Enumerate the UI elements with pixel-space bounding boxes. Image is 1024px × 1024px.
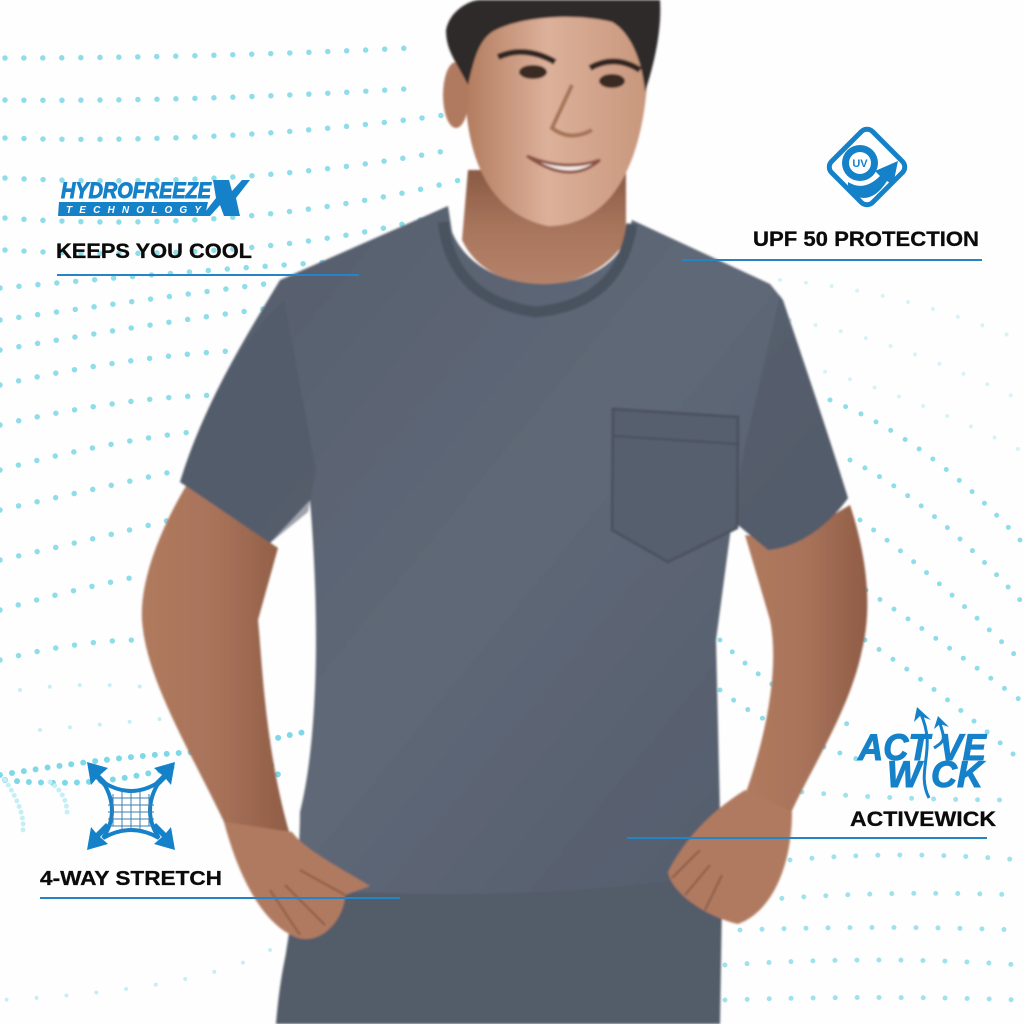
hydrofreeze logo: TECHNOLOGY (66, 205, 202, 216)
callout: upf (682, 126, 982, 261)
activewick logo: W CK (887, 754, 985, 795)
stretch icon (87, 762, 175, 850)
keeps you cool label: KEEPS YOU COOL (56, 240, 252, 263)
uv icon (826, 126, 908, 208)
activewick label: ACTIVEWICK (850, 808, 996, 831)
callout line (57, 274, 359, 276)
callout line (627, 837, 987, 839)
right hand (668, 790, 792, 924)
neck (462, 170, 626, 285)
mouth (527, 156, 600, 172)
hydrofreeze logo: HYDROFREEZE (61, 178, 212, 203)
head (465, 5, 647, 226)
pocket (612, 409, 738, 562)
eyebrows and eyes (498, 52, 640, 70)
shirt (180, 206, 848, 1024)
hair (446, 0, 660, 92)
shirt lower fold (276, 880, 720, 1024)
activewick logo: ACT VE (857, 727, 987, 768)
nose (552, 85, 592, 136)
collar (443, 222, 632, 312)
hydrofreeze logo (58, 178, 250, 216)
pocket band (613, 436, 738, 444)
upf label: UPF 50 PROTECTION (753, 227, 979, 251)
callout: hydrofreeze (56, 178, 359, 276)
left hand (224, 822, 370, 939)
right arm (745, 505, 867, 815)
callout line (40, 897, 400, 899)
stretch label: 4-WAY STRETCH (40, 867, 222, 890)
callout: activewick (627, 707, 996, 839)
left arm (142, 486, 290, 835)
activewick logo (857, 707, 987, 798)
ear (443, 62, 469, 128)
man (142, 0, 867, 1024)
uv icon: UV (852, 158, 868, 170)
sleeve shading (180, 300, 316, 543)
callout: stretch (40, 762, 400, 899)
callout line (682, 259, 982, 261)
